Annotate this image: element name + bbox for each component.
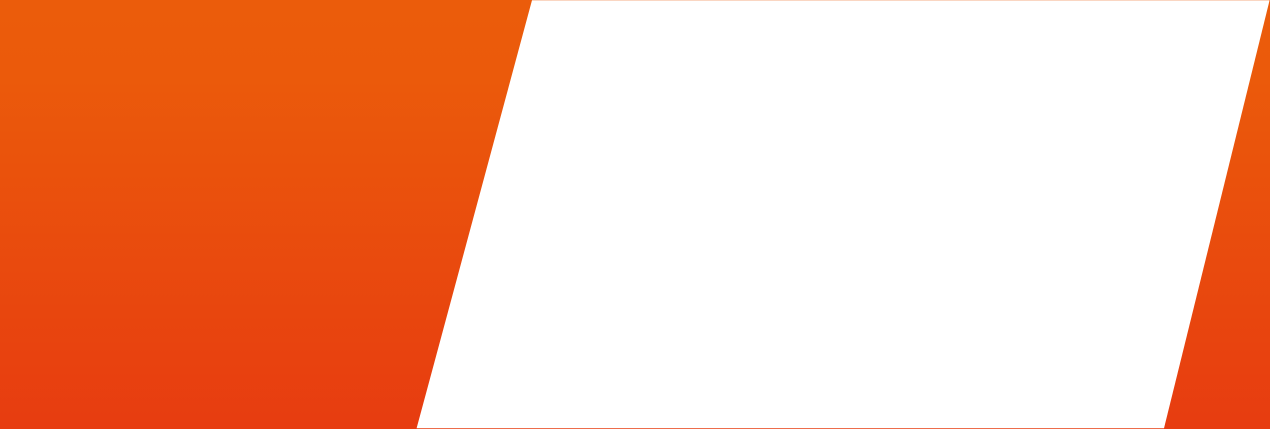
panel: white parallelogram [417,0,1270,428]
